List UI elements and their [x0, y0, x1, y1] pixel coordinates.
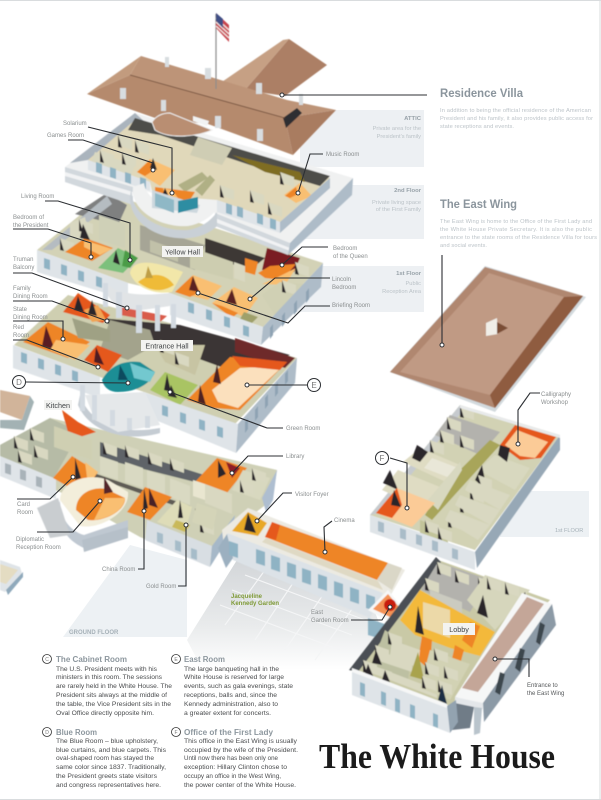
title: The White House	[319, 737, 555, 776]
room labels: 1st FLOOR	[555, 528, 583, 534]
room: blue room	[102, 362, 155, 392]
room labels: Balcony	[13, 265, 34, 271]
room labels: Living Room	[21, 194, 54, 200]
label: Yellow Hall	[162, 246, 203, 257]
room labels: GROUND FLOOR	[69, 630, 119, 636]
label: Lobby	[443, 623, 475, 635]
room labels: of the Queen	[333, 254, 368, 260]
text block: Blue Room: and congress representatives here.	[56, 782, 161, 789]
floor descriptions: 1st Floor	[396, 271, 422, 277]
front wall	[145, 520, 212, 567]
main roof	[87, 39, 336, 155]
colonnade wall	[227, 533, 383, 618]
room: gold room	[157, 500, 192, 532]
dark rear under floor above	[100, 318, 290, 372]
text block: Office of the First Lady: the power center of the White House.	[184, 782, 296, 789]
room labels: East	[311, 610, 323, 616]
garden	[187, 560, 400, 690]
room labels: Kennedy Garden	[231, 601, 279, 607]
text block: The Cabinet Room: The Cabinet Room	[56, 654, 127, 664]
room labels: Workshop	[541, 400, 569, 406]
heading: Residence Villa: state receptions and events.	[440, 124, 514, 130]
room labels: Card	[17, 502, 30, 508]
heading: Residence Villa: President and his family, it also provides public access for	[440, 116, 593, 122]
text block: Office of the First Lady: occupy an office in the West Wing,	[184, 773, 281, 780]
panel: 1st floor backdrop	[290, 266, 424, 312]
room labels: Bedroom of	[13, 215, 44, 221]
room: library	[193, 458, 247, 514]
lower rooms	[370, 630, 412, 680]
heading: The East Wing: the White House Private Secretary. It is also the public	[440, 227, 592, 233]
room labels: Family	[13, 286, 31, 292]
room labels: Truman	[13, 257, 33, 263]
label: Lobby: Lobby	[449, 625, 469, 634]
east wing roof	[390, 266, 586, 412]
room labels: Green Room	[286, 426, 320, 432]
room labels: Red	[13, 325, 24, 331]
text block: Blue Room: oval-shaped room has stayed the	[56, 755, 154, 762]
text block: The Cabinet Room: President sits always at the middle of	[56, 692, 167, 699]
floor descriptions: Private area for the	[373, 126, 421, 132]
room labels: Calligraphy	[541, 392, 571, 398]
text block: Office of the First Lady: This office in the East Wing is usually	[184, 738, 298, 745]
ground floor	[0, 410, 277, 567]
front walls	[13, 345, 100, 398]
room: music room	[284, 183, 312, 203]
room: cinema	[262, 522, 402, 590]
text block: East Room: E	[174, 657, 178, 663]
east wing upper floor	[370, 405, 560, 570]
text block: East Room: East Room	[184, 654, 225, 664]
room labels: Briefing Room	[332, 303, 370, 309]
kitchen wing	[0, 410, 96, 499]
callout D	[12, 376, 26, 388]
text block: East Room: receptions, balls and, since the	[184, 692, 277, 699]
walls	[370, 515, 475, 570]
panel: 2nd floor backdrop	[300, 185, 424, 239]
panel: ground floor backdrop	[63, 545, 187, 637]
room labels: China Room	[102, 567, 135, 573]
room labels: Bedroom	[333, 246, 357, 252]
room: red room	[84, 345, 122, 372]
left detached building scraps	[0, 390, 34, 595]
room labels: Music Room	[326, 152, 359, 158]
entrance hall interior	[155, 345, 205, 375]
text block: The Cabinet Room: Oval Office directly opposite him.	[56, 710, 154, 717]
room: lincoln bedroom	[212, 287, 258, 323]
text block: The Cabinet Room: the table, the Vice President sits in the	[56, 701, 171, 708]
flag and pole	[216, 13, 229, 89]
room labels: Lincoln	[332, 277, 351, 283]
east wing lower floor	[349, 557, 556, 735]
floor: entrance hall level	[13, 293, 297, 453]
room: yellow hall	[130, 263, 183, 293]
south portico columns	[78, 385, 160, 437]
callout F	[376, 452, 388, 464]
room labels: Room	[13, 333, 29, 339]
truman balcony columns	[103, 280, 176, 333]
room labels: the President	[13, 223, 49, 229]
text block: Blue Room: The Blue Room – blue upholstery,	[56, 738, 158, 745]
text block: Blue Room: blue curtains, and blue carpets. This	[56, 747, 167, 754]
leader lines and dots	[13, 93, 540, 677]
chimneys	[120, 57, 303, 141]
text block: Blue Room: the President greets state visitors	[56, 773, 158, 780]
heading: Residence Villa	[440, 88, 593, 130]
colonnade and cinema	[218, 508, 405, 640]
room labels: the East Wing	[527, 691, 564, 697]
text block: The Cabinet Room: C	[45, 657, 49, 663]
floor descriptions: Private living space	[372, 200, 421, 206]
label: Entrance Hall: Entrance Hall	[145, 342, 189, 350]
room: bedroom of the president	[65, 224, 113, 261]
text block: East Room: a greater extent for concerts.	[184, 710, 271, 717]
room labels: Gold Room	[146, 584, 176, 590]
heading: Residence Villa: In addition to being the official residence of the American	[440, 108, 591, 114]
west side rooms	[90, 152, 135, 178]
interior rooms behind	[100, 442, 220, 482]
room labels: Cinema	[334, 518, 355, 524]
rear rooms	[421, 562, 490, 612]
heading: Residence Villa: Residence Villa	[440, 88, 524, 100]
floor descriptions: Reception Area	[382, 289, 422, 295]
text block: Blue Room: same color since 1837. Traditionally,	[56, 764, 166, 771]
floor descriptions: of the First Family	[376, 207, 421, 213]
text block: Office of the First Lady	[172, 727, 298, 789]
room labels: Library	[286, 454, 304, 460]
front parapet	[65, 167, 133, 205]
label: Kitchen: Kitchen	[46, 401, 70, 410]
room: solarium	[155, 187, 195, 205]
panel: attic floor backdrop	[300, 110, 424, 167]
room: diplomatic reception room	[37, 477, 128, 552]
heading: The East Wing: The East Wing is home to the Office of the First Lady and	[440, 219, 592, 225]
heading: The East Wing: and social events.	[440, 243, 487, 249]
heading: The East Wing: The East Wing	[440, 199, 517, 211]
room labels: Games Room	[47, 133, 84, 139]
room labels: Dining Room	[13, 294, 48, 300]
text block: The Cabinet Room: ministers in this room. The sessions	[56, 674, 163, 681]
room: bedroom of the queen	[245, 248, 300, 285]
callout F: F	[380, 454, 385, 463]
room labels: Visitor Foyer	[295, 492, 329, 498]
floor descriptions: ATTIC	[404, 116, 422, 122]
front wall	[352, 670, 450, 733]
floor descriptions: Public	[406, 281, 421, 287]
room: state dining room	[23, 322, 90, 360]
callout D: D	[16, 378, 22, 387]
room labels: Entrance to	[527, 683, 558, 689]
room: east room	[187, 356, 287, 410]
room labels: Room	[17, 510, 33, 516]
room: lobby	[400, 590, 495, 672]
callout E: E	[311, 381, 317, 390]
text block: Blue Room: D	[45, 730, 49, 736]
panel: east wing 1st floor backdrop	[500, 491, 589, 537]
room: china room	[127, 487, 172, 520]
text block: Blue Room: Blue Room	[56, 727, 97, 737]
room labels: Garden Room	[311, 618, 349, 624]
room labels: State	[13, 307, 28, 313]
room labels: Bedroom	[332, 285, 356, 291]
east rooms	[220, 185, 234, 200]
room: living room	[98, 248, 138, 273]
text block: East Room: White House is reserved for large	[184, 674, 284, 681]
room labels	[13, 121, 583, 697]
terrace: entrance to the east wing	[452, 593, 556, 735]
room labels: Reception Room	[16, 545, 61, 551]
floor: attic level	[65, 113, 353, 255]
front walls	[37, 250, 128, 300]
room: briefing room	[175, 275, 222, 300]
room labels: Jacqueline	[231, 594, 263, 600]
text block: The Cabinet Room: are rarely held in the White House. The	[56, 683, 172, 690]
heading: The East Wing	[440, 199, 597, 249]
balcony bow	[130, 183, 217, 238]
text block: East Room: Kennedy administration, also to	[184, 701, 278, 708]
text block: East Room: The large banqueting hall in the	[184, 666, 279, 673]
rear rooms	[70, 217, 90, 240]
room labels: Diplomatic	[16, 537, 44, 543]
floor descriptions: President's family	[377, 134, 421, 140]
text block: Blue Room	[42, 727, 167, 789]
room: office of the first lady	[376, 488, 435, 527]
text block: East Room	[172, 654, 293, 717]
floor: second floor, yellow hall level	[37, 193, 323, 345]
room: visitor foyer	[232, 512, 267, 536]
room: east garden room	[368, 590, 402, 640]
text block: Office of the First Lady: Until now there has been only one	[184, 755, 278, 762]
text block: The Cabinet Room	[42, 654, 172, 717]
room: card room	[53, 456, 98, 495]
callout E	[308, 378, 320, 392]
room labels: Dining Room	[13, 315, 48, 321]
text block: Office of the First Lady: exception: Hillary Clinton chose to	[184, 764, 287, 771]
room: family dining room	[63, 293, 110, 342]
heading: The East Wing: entrance to the state rooms of the Residence Villa for tours	[440, 235, 597, 241]
room: green room	[150, 372, 198, 405]
room: calligraphy workshop	[498, 425, 556, 462]
floor descriptions: 2nd Floor	[394, 188, 422, 194]
label: Entrance Hall	[141, 340, 193, 351]
room: games room	[137, 158, 175, 186]
room labels: Solarium	[63, 121, 87, 127]
text block: Office of the First Lady: F	[174, 730, 178, 736]
text block: Office of the First Lady: Office of the First Lady	[184, 727, 273, 737]
text block: East Room: events, such as gala evenings, state	[184, 683, 293, 690]
label: Yellow Hall: Yellow Hall	[165, 248, 200, 256]
floor descriptions	[372, 116, 422, 295]
text block: The Cabinet Room: The U.S. President meets with his	[56, 666, 158, 673]
text block: Office of the First Lady: occupied by the wife of the President.	[184, 747, 298, 754]
